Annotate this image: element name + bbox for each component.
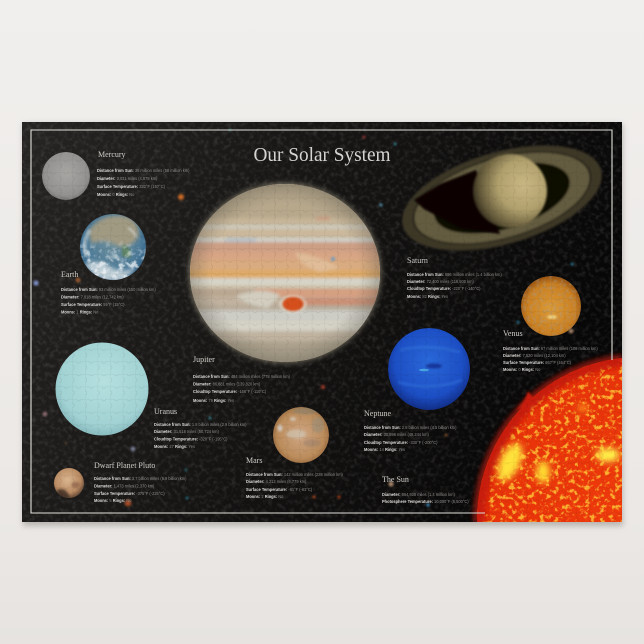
text block: Earth bbox=[61, 270, 156, 315]
planet: Mercury bbox=[42, 152, 90, 200]
text block: Saturn: Saturn bbox=[407, 256, 428, 265]
text block: Saturn: Moons: 82 Rings: Yes bbox=[407, 294, 449, 299]
globe bbox=[473, 154, 547, 228]
text block: Neptune bbox=[364, 409, 457, 452]
text block: Dwarf Planet Pluto: Surface Temperature: -375°F (-225°C) bbox=[94, 491, 165, 496]
text block: Mercury: Mercury bbox=[98, 150, 126, 159]
great red spot bbox=[282, 297, 304, 311]
text block: Dwarf Planet Pluto: Dwarf Planet Pluto bbox=[94, 461, 155, 470]
text block: Dwarf Planet Pluto: Distance from Sun: 3.7 billion miles (5.9 billion km) bbox=[94, 476, 187, 481]
text block: Mercury: Distance from Sun: 36 million miles (58 million km) bbox=[97, 168, 190, 173]
text block: Venus: Surface Temperature: 867°F (464°C) bbox=[503, 360, 571, 365]
text block: Earth: Diameter: 7,918 miles (12,742 km) bbox=[61, 294, 124, 300]
text block: Venus: Distance from Sun: 67 million miles (108 million km) bbox=[503, 346, 598, 351]
text block: Mars: Mars bbox=[246, 456, 262, 465]
planet: Pluto bbox=[54, 468, 84, 499]
text block: The Sun bbox=[382, 475, 469, 504]
text block: Neptune: Moons: 14 Rings: Yes bbox=[364, 447, 406, 452]
stars bbox=[33, 129, 573, 507]
puzzle drop shadow bbox=[23, 124, 623, 526]
text block: Neptune: Diameter: 30,598 miles (49,244 km) bbox=[364, 432, 429, 437]
planet: Neptune bbox=[388, 328, 470, 410]
text block: Jupiter: Distance from Sun: 484 million miles (778 million km) bbox=[193, 374, 290, 379]
planet: Saturn with rings bbox=[401, 144, 603, 252]
text block: Jupiter bbox=[193, 355, 290, 403]
text block: Jupiter: Diameter: 86,881 miles (139,820 km) bbox=[193, 381, 261, 387]
text block: Dwarf Planet Pluto: Diameter: 1,473 miles (2,370 km) bbox=[94, 483, 155, 489]
text block: Mars: Diameter: 4,212 miles (6,779 km) bbox=[246, 479, 307, 484]
text block: Jupiter: Moons: 79 Rings: Yes bbox=[193, 398, 235, 403]
text block: Mars: Moons: 2 Rings: No bbox=[246, 494, 284, 499]
planet shadow on rings bbox=[414, 170, 500, 234]
starfield background bbox=[22, 122, 622, 522]
text block: Mercury: Diameter: 3,031 miles (4,878 km) bbox=[97, 176, 158, 181]
text block: Neptune: Cloudtop Temperature: -330°F (-200°C) bbox=[364, 440, 438, 445]
text block: Dwarf Planet Pluto: Moons: 5 Rings: No bbox=[94, 498, 132, 503]
puzzle piece texture bbox=[22, 122, 622, 522]
text block: Jupiter: Jupiter bbox=[193, 355, 215, 364]
text block: Uranus: Uranus bbox=[154, 407, 177, 416]
text block: Uranus: Moons: 27 Rings: Yes bbox=[154, 444, 196, 449]
text block: Uranus: Cloudtop Temperature: -320°F (-195°C) bbox=[154, 436, 228, 442]
text block: Mars: Surface Temperature: -81°F (-63°C) bbox=[246, 487, 313, 492]
decorative inner frame bbox=[31, 130, 612, 513]
text block: Mercury bbox=[97, 150, 190, 197]
planet: the Sun bbox=[473, 354, 625, 525]
planet: Uranus bbox=[56, 342, 148, 436]
text block: Uranus: Diameter: 31,518 miles (50,724 km) bbox=[154, 429, 219, 434]
text block: Venus bbox=[503, 329, 598, 372]
text block: Earth: Earth bbox=[61, 270, 78, 279]
text block: Uranus bbox=[154, 407, 247, 449]
planet: Venus bbox=[521, 276, 581, 336]
text block: Venus: Venus bbox=[503, 329, 523, 338]
text block: Earth: Moons: 1 Rings: No bbox=[61, 309, 99, 315]
title: Our Solar System bbox=[254, 145, 390, 166]
text block: Saturn: Diameter: 72,400 miles (116,500 km) bbox=[407, 279, 474, 284]
planet: Mars bbox=[273, 407, 329, 463]
text block: Jupiter: Cloudtop Temperature: -166°F (-110°C) bbox=[193, 389, 267, 394]
text block: Saturn bbox=[407, 256, 502, 299]
text block: Mars bbox=[246, 456, 343, 499]
text block: Neptune: Distance from Sun: 2.8 billion miles (4.5 billion km) bbox=[364, 425, 457, 430]
planet: Jupiter bbox=[185, 180, 385, 370]
text block: Uranus: Distance from Sun: 1.8 billion miles (2.9 billion km) bbox=[154, 422, 247, 427]
text block: Saturn: Distance from Sun: 886 million miles (1.4 billion km) bbox=[407, 272, 502, 277]
text block: Mars: Distance from Sun: 142 million miles (228 million km) bbox=[246, 472, 343, 477]
text block: The Sun: The Sun bbox=[382, 475, 409, 484]
text block: Earth: Surface Temperature: 59°F (15°C) bbox=[61, 302, 125, 307]
text block: Venus: Diameter: 7,520 miles (12,104 km) bbox=[503, 353, 566, 358]
text block: Neptune: Neptune bbox=[364, 409, 392, 418]
text block: Mercury: Moons: 0 Rings: No bbox=[97, 192, 135, 197]
text block: The Sun: Photosphere Temperature: 10,000°F (5,500°C) bbox=[382, 499, 469, 504]
text block: Saturn: Cloudtop Temperature: -220°F (-140°C) bbox=[407, 286, 481, 291]
rings bbox=[401, 144, 603, 252]
text block: Mercury: Surface Temperature: 332°F (167°C) bbox=[97, 184, 165, 189]
panel: puzzle board bbox=[22, 122, 625, 525]
text block: Earth: Distance from Sun: 93 million miles (150 million km) bbox=[61, 287, 156, 292]
text block: The Sun: Diameter: 864,938 miles (1.4 million km) bbox=[382, 492, 455, 497]
text block: Venus: Moons: 0 Rings: No bbox=[503, 367, 541, 372]
text block: Dwarf Planet Pluto bbox=[94, 461, 187, 503]
planet: Earth bbox=[80, 214, 146, 281]
